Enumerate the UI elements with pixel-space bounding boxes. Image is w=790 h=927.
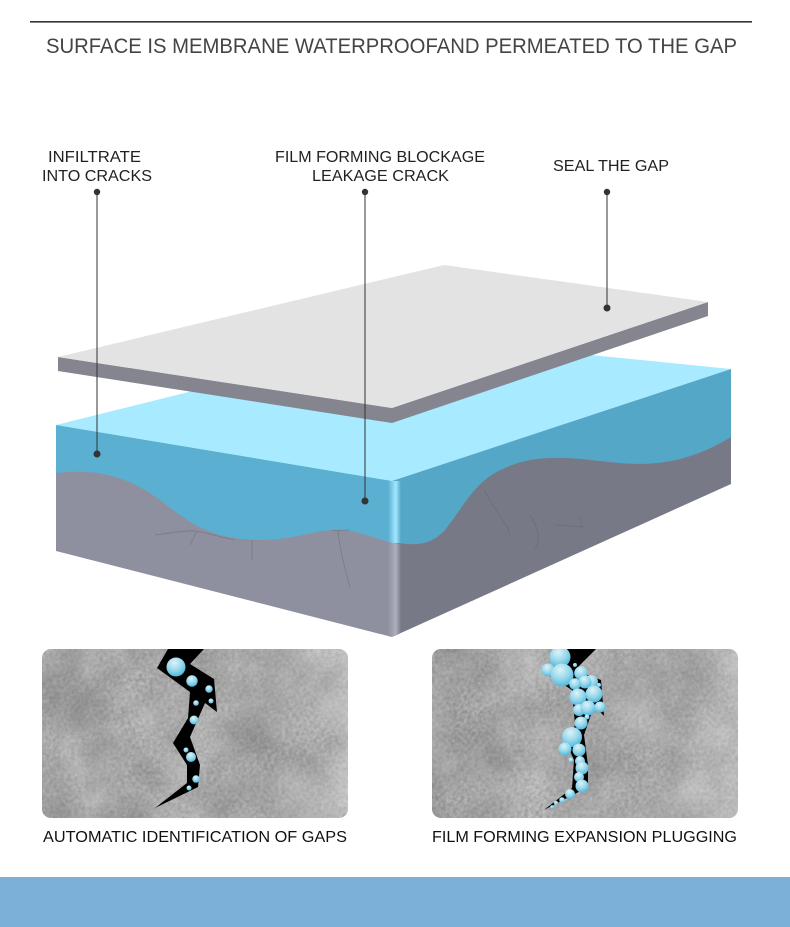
label: infiltrate into cracks: INFILTRATE [48, 149, 141, 166]
icon: open crack [155, 649, 217, 808]
water bubbles [166, 658, 214, 790]
cracks in concrete [155, 490, 585, 587]
slab top face [58, 265, 708, 408]
label: film forming blockage [275, 149, 485, 504]
blue layer top face [56, 337, 731, 481]
title: SURFACE IS MEMBRANE WATERPROOFAND PERMEATED TO THE GAP [46, 35, 737, 58]
label: seal the gap [553, 158, 669, 312]
concrete texture [42, 649, 348, 818]
blue layer front-left face [56, 425, 392, 600]
label: infiltrate into cracks [42, 149, 152, 458]
bottom band [0, 877, 790, 927]
expanded bubbles [542, 646, 606, 809]
caption: automatic identification of gaps: AUTOMATIC IDENTIFICATION OF GAPS [43, 829, 347, 846]
label: film forming blockage: LEAKAGE CRACK [312, 168, 449, 185]
concrete front-right face [392, 437, 731, 637]
caption: film forming expansion plugging: FILM FORMING EXPANSION PLUGGING [432, 829, 737, 846]
concrete texture [432, 649, 738, 818]
slab edge [58, 302, 708, 423]
icon: plugged crack [544, 649, 604, 810]
membrane slab [58, 265, 708, 423]
layered block diagram [56, 337, 731, 637]
top rule [30, 21, 752, 23]
panel: film forming expansion plugging [432, 646, 738, 818]
blue layer front-right face [392, 369, 731, 600]
concrete front-left face [56, 472, 392, 637]
label: seal the gap: SEAL THE GAP [553, 158, 669, 175]
label: film forming blockage: FILM FORMING BLOCKAGE [275, 149, 485, 166]
corner highlight [388, 481, 401, 637]
label: infiltrate into cracks: INTO CRACKS [42, 168, 152, 185]
panel: automatic identification of gaps [42, 649, 348, 818]
